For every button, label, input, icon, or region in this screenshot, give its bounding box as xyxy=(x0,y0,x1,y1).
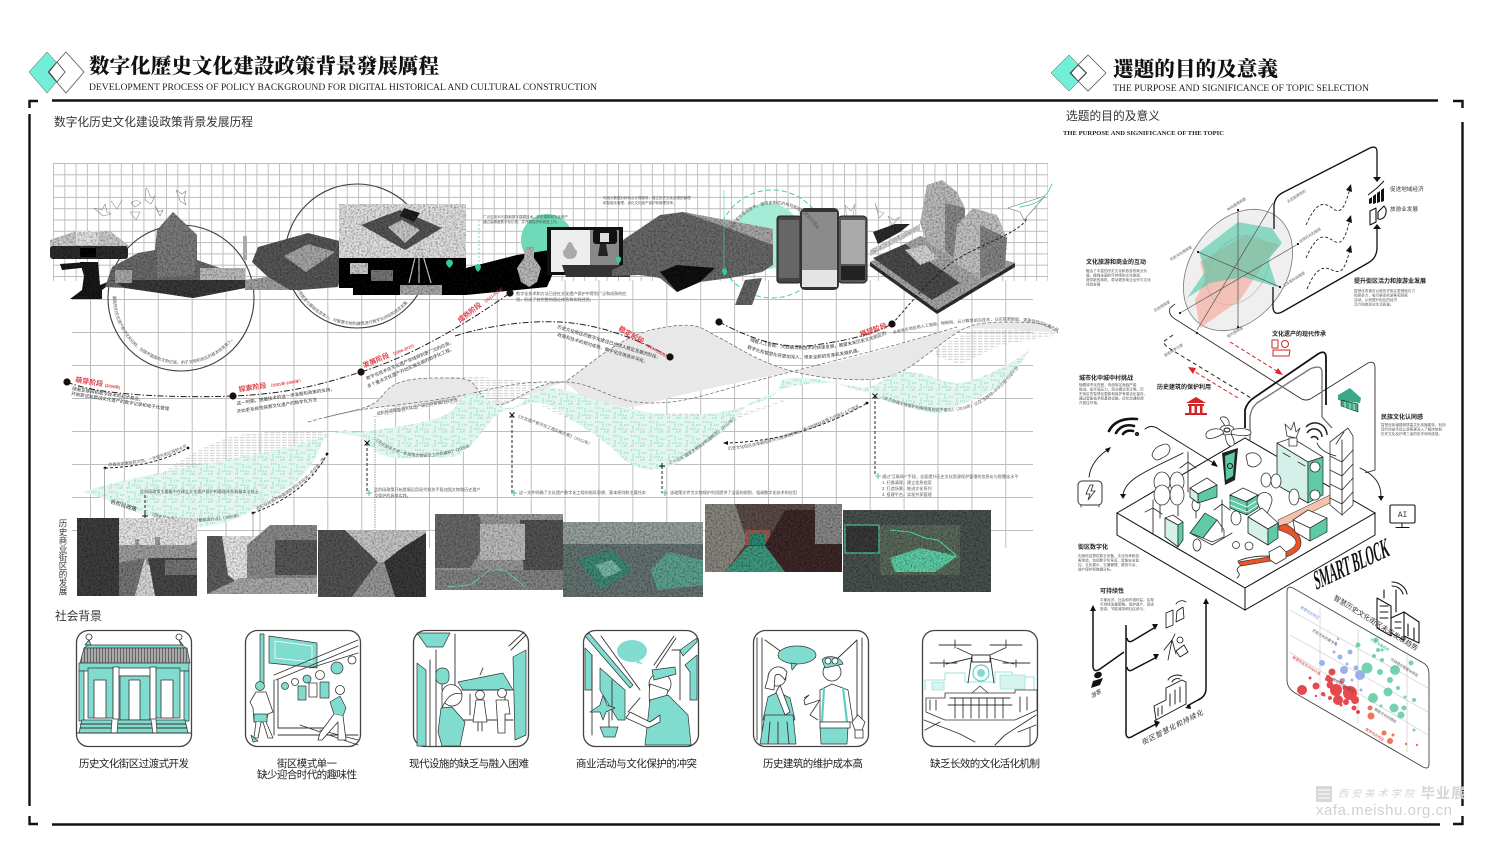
curve: policy 3 xyxy=(252,452,328,536)
arrowhead ai xyxy=(1378,496,1384,501)
arrowhead wifi xyxy=(1105,447,1111,453)
note: arc caption teal circle: 数字孪生和虚拟现实技术，使历史街区的体验和感知更加沉浸式 xyxy=(726,200,820,239)
plant pot xyxy=(1285,422,1300,446)
curve: policy 1: 改善历史建筑和文物，一步提升街区保护水平 xyxy=(108,444,186,466)
callout: policy 9 xyxy=(872,366,1018,497)
squiggle arrows xyxy=(1306,189,1350,289)
icon: double diamonds right xyxy=(1051,55,1106,91)
note: arc caption circle 1: 基础性的文化遗产数字化和归档，加强字面面向文物记录，用于文物和街区的基本信息录入。 xyxy=(112,296,233,364)
antenna post xyxy=(243,236,247,260)
stage: 发展阶段: 多个重点文化遗产开始实施全面的数字化工程。 xyxy=(366,345,455,390)
text: urban village: 史街区的智慧化更新和保护有助活化保存， xyxy=(1079,391,1147,396)
illustration: woman with book xyxy=(585,633,697,745)
card: commerce vs conservation xyxy=(584,630,698,746)
caption: card 2 xyxy=(257,757,357,781)
panel sub heading: purpose: THE PURPOSE AND SIGNIFICANCE OF THE TOPIC xyxy=(1063,130,1224,137)
callout: policy 2: 《历史文化遗产保护工程质量管理办法》（2000年） xyxy=(152,512,239,522)
photo row: historic streets xyxy=(77,504,991,597)
icons: map pins xyxy=(446,256,727,276)
text: urban village: 挑战。如环境压力、商业模式变迁等。历 xyxy=(1079,386,1144,392)
note: arc caption circle 2: 开展文物普查与基础信息录入，对重要文物和建筑进行数字化测绘和信息采集 xyxy=(294,281,408,326)
text: digital street: 客体验，包括数字化导览、智能安全监 xyxy=(1078,558,1139,562)
stage: 展望阶段 xyxy=(747,321,888,360)
label: visitor: 游客 xyxy=(1090,687,1104,700)
paper plane xyxy=(1008,184,1052,220)
watermark xyxy=(1316,785,1465,819)
label: pre-phase policy: 各阶段政策 xyxy=(109,497,138,514)
circle: teal accent left xyxy=(521,214,573,266)
squiggle heads xyxy=(1346,184,1352,253)
chart: future trend scatter xyxy=(1287,587,1429,768)
chart labels: 智能文化的感知 xyxy=(1373,707,1398,724)
text: cultural inheritance: 文化遗产的现代传承 xyxy=(1272,330,1326,338)
watermark show: 毕业展 xyxy=(1421,785,1465,801)
note: collage caption 2: 和智能化管理，优化文化遗产保护和管理效率。 xyxy=(603,200,676,205)
arrow: block to bus xyxy=(1123,453,1183,495)
title: right: 選題的目的及意義 xyxy=(1113,57,1278,81)
axis labels: 历史感观度 xyxy=(1153,299,1171,313)
stage: 探索阶段 xyxy=(236,375,335,415)
text: urban village: 随着城市化进程，传统街区面临严峻 xyxy=(1079,382,1137,387)
caption: card 3: 现代设施的缺乏与融入困难 xyxy=(409,757,530,770)
chart: radar xyxy=(1153,188,1322,358)
photo: roof structure xyxy=(612,212,773,305)
dots: red xyxy=(1297,668,1360,714)
photo: camera box xyxy=(547,227,630,277)
band: dashed wave outlines xyxy=(308,322,1058,422)
stage: 萌芽阶段: 萌芽阶段 (2000年) xyxy=(75,375,122,391)
panel: timeline grid xyxy=(53,163,1048,548)
stage: 展望阶段: 数字化和智慧化将更加深入，带来全新的变革和发展机遇。 xyxy=(747,344,859,360)
caption: card 5: 历史建筑的维护成本高 xyxy=(763,757,863,770)
curve: policy 1 xyxy=(104,444,190,518)
arrow: dashed red forward xyxy=(1230,342,1283,375)
callout: policy 6 xyxy=(509,412,646,496)
text: digital street: 街区数字化 xyxy=(1078,543,1108,551)
band: solid gray area xyxy=(308,322,1058,422)
subtitle: left: DEVELOPMENT PROCESS OF POLICY BACKGROUND FOR DIGITAL HISTORICAL AND CULTURAL CONSTRUCTION xyxy=(89,82,598,92)
circle: teal accent right xyxy=(718,190,826,298)
caption: card 2: 缺少迎合时代的趣味性 xyxy=(257,768,357,781)
watermark url: xafa.meishu.org.cn xyxy=(1316,802,1452,819)
text: digital street: 控、文化展示、交通管理、服务平台、 xyxy=(1078,562,1139,567)
vertical label: street development: 历史商业街区的发展 xyxy=(58,519,68,596)
windmill xyxy=(1180,452,1196,492)
curve: policy 8: 历史文化街区逐渐被用来作为旅游目的地，通过智慧科技等方式吸引人们游览 xyxy=(728,404,860,450)
stage: 萌芽阶段: 随着互联网和数字技术的初步普及， xyxy=(72,385,144,403)
stage: 发展阶段: 发展阶段（2006-2010） xyxy=(361,339,417,370)
text: sustainability: 旅游、节能减排和社区参与。 xyxy=(1100,606,1147,611)
cube building xyxy=(1248,508,1278,545)
battery box xyxy=(1145,500,1183,547)
flat building xyxy=(1293,510,1327,541)
callout: policy 9: 《关于加强文物保护利用改革的若干意见》（2018年）以及"互联网+中华文明"行动计划 xyxy=(882,366,1018,412)
line: policy 5 xyxy=(374,419,376,530)
axis labels: 自然风光的感观 xyxy=(1298,226,1322,244)
phones: app screens xyxy=(777,208,867,290)
icon: double diamonds left xyxy=(29,52,84,93)
arrowheads flow xyxy=(1090,598,1209,728)
solar house xyxy=(1190,500,1232,545)
arrowhead lower xyxy=(1373,224,1381,229)
text: national identity xyxy=(1381,413,1446,436)
callout: policy 6: 这一文件明确了文化遗产数字化工程的指导思想、基本原则和主要任务 xyxy=(519,489,646,495)
illustration: temple gate xyxy=(77,634,191,733)
band: gray hatched textures xyxy=(150,327,1058,482)
van xyxy=(1269,546,1286,564)
trees xyxy=(1154,472,1200,518)
card: revitalization mechanism xyxy=(922,630,1038,746)
icon: red bulb xyxy=(1272,340,1290,356)
panel xyxy=(1287,587,1429,768)
callout: policy 2: 此阶段政策主要集中在建立文化遗产保护的管理体系和基本法规上 xyxy=(140,488,259,494)
illustration: two people talking xyxy=(757,638,865,744)
arrow: dashed exchange black xyxy=(1163,335,1251,398)
icon: red temple xyxy=(1185,397,1207,415)
arrowhead upper xyxy=(1373,177,1381,182)
text: national identity: 民族文化认同感 xyxy=(1381,413,1423,421)
illustration: street and girl xyxy=(417,632,526,746)
timeline: development stages xyxy=(63,195,1059,415)
axis labels: 历史文化感观度 xyxy=(1169,244,1193,262)
chart labels: 历史文化的数字化 xyxy=(1311,628,1339,647)
dashed leader: teal xyxy=(478,220,480,264)
isometric city xyxy=(870,180,1015,314)
text: tourism and commerce: 体验发展 xyxy=(1086,282,1101,286)
watermark school: 西安美术学院 xyxy=(1338,788,1416,800)
callout: policy 9: 3. 搭建平台，实现共享管理 xyxy=(882,491,932,497)
panel heading: purpose: 选题的目的及意义 xyxy=(1066,109,1160,123)
icon: green temple xyxy=(1338,388,1361,412)
scanner on tripod xyxy=(50,231,128,299)
heading: social background: 社会背景 xyxy=(55,609,102,623)
callout: policy 9: 1. 扫描清理，建立信息档案 xyxy=(882,479,932,485)
text: sustainability: 可持续性 xyxy=(1100,587,1124,595)
callout: policy 9: 通过"互联网+"手段，全面提升历史文化资源保护管理的信息化与智慧化水平 xyxy=(882,473,1018,479)
callout: policy 6: 《文化遗产数字化工程实施方案》（2012年） xyxy=(518,414,590,445)
chart labels: 智慧街区的文化价值 xyxy=(1291,655,1322,676)
stage: 探索阶段: 探索阶段 （2001年-2005年） xyxy=(238,375,304,394)
label: smart block: SMART BLOCK xyxy=(1311,532,1392,596)
text: sustainability xyxy=(1100,587,1154,611)
stage: 稳定阶段: 稳定阶段（2014-2020） xyxy=(617,324,671,360)
photo: corridor scan xyxy=(705,504,842,572)
note: collage caption 2: 利用大数据分析和云计算服务，建立历史文化资源的管理 xyxy=(603,195,691,200)
text: district vitality: 提升街区活力和旅游业发展 xyxy=(1354,277,1426,285)
birds left xyxy=(94,188,186,220)
icon: visitor xyxy=(1091,671,1103,688)
callout: policy 7 xyxy=(659,418,797,496)
flow: sustainability arrows xyxy=(1093,603,1206,738)
arrow: radar to economy lower xyxy=(1273,228,1377,313)
arrow: dashed red backward xyxy=(1188,367,1238,398)
text: urban village xyxy=(1079,374,1147,405)
connector: brown loop xyxy=(1170,304,1375,473)
callout: policy 2 xyxy=(140,488,259,522)
axis labels xyxy=(1153,188,1322,358)
callout: policy 7: 《"十三五"国家文物保护利用规划》（2017年） xyxy=(670,418,734,464)
note: collage caption 1: 广泛应用3D扫描和数字建模技术，历史建筑和文化遗产 xyxy=(483,214,568,219)
icon: growth chart xyxy=(1368,181,1384,204)
axes xyxy=(1180,203,1298,330)
curves: stage connectors xyxy=(67,218,1027,397)
watermark logo xyxy=(1316,786,1332,802)
text: urban village: 城市化中城中村挑战 xyxy=(1079,374,1133,382)
chart labels: 智慧化的街区 xyxy=(1299,605,1321,620)
connector: thick black xyxy=(1245,352,1326,428)
block base xyxy=(1117,438,1375,610)
policy callouts xyxy=(104,366,1018,574)
illustration: street with lanterns xyxy=(250,634,358,745)
photo: old street 2 xyxy=(207,525,317,594)
stage: 探索阶段: 这一时期，随着技术的进一步发展和政策的支持， xyxy=(236,385,335,407)
stage: 展望阶段: 展望阶段 xyxy=(859,321,888,339)
text: digital street xyxy=(1078,543,1139,572)
axis dots xyxy=(1179,209,1299,334)
arrow: wifi to phone xyxy=(1145,426,1215,464)
photo: old building ruin xyxy=(105,212,245,298)
stage: 稳定阶段: 历史文化街区的数字化建设已经进入稳定发展的阶段， xyxy=(556,323,662,361)
photo: old street 3 xyxy=(318,530,426,597)
subtitle: right: THE PURPOSE AND SIGNIFICANCE OF TOPIC SELECTION xyxy=(1113,83,1370,93)
callout: policy 9: 2. 打造场景，推进文化系列 xyxy=(882,485,932,491)
arrow: bus to wifi xyxy=(1089,449,1109,477)
card: transitional development xyxy=(76,630,192,746)
connector: gray xyxy=(1250,367,1332,440)
band: green maze texture xyxy=(83,350,1030,527)
photo: vase panel xyxy=(466,247,553,295)
text: district vitality: 智慧化改造可以使历史街区更具吸引力 xyxy=(1354,288,1415,293)
icon: wifi xyxy=(1109,419,1138,435)
fan xyxy=(1206,417,1251,446)
photo: dashboard xyxy=(843,510,991,592)
dots: stage markers xyxy=(63,289,896,400)
callout: policy 4 xyxy=(364,439,480,498)
callout: policy 4: 《文化部关于进一步加强文物安全工作的通知》（2006年） xyxy=(376,439,470,458)
note: collage caption 1: 通过高精度数字化记录，并开展保护和修复工作。 xyxy=(483,219,560,224)
icon: phone and house xyxy=(1166,601,1186,628)
text: district vitality: 和竞争力，吸引更多的游客和商家 xyxy=(1354,292,1408,298)
axis labels: 休闲度感观度 xyxy=(1226,196,1247,212)
icon: skyline xyxy=(1377,582,1419,643)
phone card xyxy=(1222,448,1238,485)
arrowhead phone xyxy=(1211,460,1218,467)
chart grid xyxy=(1289,608,1428,752)
label: regional economy: 促进地域经济 xyxy=(1390,185,1424,193)
text: district vitality: 活动。从而提升街区的经济 xyxy=(1354,297,1398,302)
icon: ai monitor: AI xyxy=(1398,511,1407,520)
axis labels: 游览和参与度 xyxy=(1163,342,1184,358)
stage: 萌芽阶段: 开始尝试和尝试文化遗产的数字记录和电子化管理 xyxy=(71,390,170,413)
chart labels: 数字化的街区 xyxy=(1364,727,1386,742)
photo: courtyard scan xyxy=(245,233,363,290)
icon: windmill solar xyxy=(1164,634,1188,660)
wave caption: future: 未来将多地应用人工智能、物联网、云计算等前沿技术，以实现更智能、更高效的文化遗产保护。 xyxy=(893,317,1059,334)
title: left: 数字化歷史文化建設政策背景發展厲程 xyxy=(89,54,439,78)
text: tourism and commerce: 融合了丰富的历史文化和旅游的商业价 xyxy=(1086,268,1147,273)
stage: 发展阶段: 数字化技术在文化遗产领域得到更广泛的应用， xyxy=(365,338,455,382)
text: urban village: 升居住环境。 xyxy=(1079,400,1101,405)
stage: 成熟阶段 xyxy=(456,282,627,325)
panel heading: timeline: 数字化历史文化建设政策背景发展历程 xyxy=(54,115,253,129)
photo: tree street xyxy=(435,514,563,590)
illustration: drone over building xyxy=(924,640,1037,745)
right panel: diagram xyxy=(1078,147,1446,768)
text: digital street: 遗产保护和数据分析。 xyxy=(1078,566,1114,572)
leader: teal circle xyxy=(723,190,725,270)
text: national identity: 历史文化及护得三者的历史和传统感。 xyxy=(1381,431,1442,436)
stage: 稳定阶段: 政策和技术的相对成熟，数字化应用逐步深化。 xyxy=(556,331,649,366)
text: district vitality: 活力和旅游业生活质量。 xyxy=(1354,302,1394,306)
polygon: series green xyxy=(1187,222,1282,298)
label: policy 5: 此阶段政策强调文化遗产保护和管理的科学性 xyxy=(376,396,458,416)
text: tourism and commerce xyxy=(1086,258,1151,286)
photo: model overlay xyxy=(563,522,703,597)
isometric smart block xyxy=(1117,417,1375,610)
label: smart sustainable: 街区智慧化和持续化 xyxy=(1140,708,1205,747)
text: digital street: 利用科技提供数字设备、文化传承和游 xyxy=(1078,553,1139,558)
polygon: series pink xyxy=(1195,235,1280,328)
road orange xyxy=(1238,524,1301,566)
road pale xyxy=(1278,495,1334,528)
dots: green xyxy=(1356,638,1416,732)
photo: old street 1 xyxy=(77,518,197,596)
caption: card 1: 历史文化街区过渡式开发 xyxy=(79,757,190,770)
text: tourism and commerce: 文化旅游和商业的互动 xyxy=(1086,258,1146,266)
text: urban village: 通过智能技术和基础设施，优化交通和提 xyxy=(1079,396,1144,400)
green box xyxy=(1190,478,1217,503)
building teal tall xyxy=(1277,438,1323,503)
tower jenga xyxy=(1330,428,1353,515)
stage: 萌芽阶段 xyxy=(71,375,170,413)
cloud 1 xyxy=(1152,444,1261,467)
stage: 成熟阶段: 成熟阶段（2011-2013） xyxy=(456,282,506,325)
arrow: radar to economy upper xyxy=(1274,147,1377,229)
caption: card 6: 缺乏长效的文化活化机制 xyxy=(930,757,1040,770)
chart labels: 街区发展趋势 xyxy=(1369,637,1391,652)
right section header xyxy=(1051,55,1370,93)
axis labels: 业态和建筑的 xyxy=(1286,188,1307,204)
card: modern facilities xyxy=(414,630,528,746)
chart labels xyxy=(1291,605,1420,742)
card: maintenance cost xyxy=(754,630,868,746)
text: sustainability: 平衡经济、社会和环境利益。实现 xyxy=(1100,597,1154,602)
pin xyxy=(1257,493,1272,517)
callout: policy 4: 此阶段政策开始提倡运用现代科技手段加强文物和历史遗产 xyxy=(374,486,480,492)
text: tourism and commerce: 提供新的商机，带动更多商业合作与文化 xyxy=(1086,277,1151,282)
stage: 探索阶段: 开始更系统地探索文化遗产的数字化方法 xyxy=(236,396,318,415)
text: tourism and commerce: 值。增强全面的可持续的文化旅游， xyxy=(1086,272,1144,278)
text: national identity: 智慧化街道能够提高文化传播能效，利用 xyxy=(1381,422,1446,427)
callout: policy 7: 该政策文件为文物保护利用提供了全面的规划，强调数字化技术的应用 xyxy=(670,489,797,495)
stage: 成熟阶段: 用，形成了较完整的理论体系和实践经验。 xyxy=(516,296,594,302)
photo: model render xyxy=(339,204,466,295)
chart labels: 可持续的智能化街区 xyxy=(1389,657,1420,678)
path light xyxy=(1237,556,1270,578)
callout: policy 4: 及保护的具体实践。 xyxy=(374,492,411,498)
stage: 展望阶段: 随着人工智能、大数据等新技术的快速发展，展望未来历史文化街区的 xyxy=(750,331,886,350)
caption: card 4: 商业活动与文化保护的冲突 xyxy=(576,757,698,770)
arrow: wifi to tower xyxy=(1317,443,1336,456)
icon: ev bus xyxy=(1078,481,1102,507)
card: single street mode xyxy=(246,630,360,746)
stage: 成熟阶段: 数字化技术和方法已经在文化遗产保护中得到广泛和成熟的应 xyxy=(516,290,627,296)
text: sustainability: 可持续发展策略。保护遗产、促进 xyxy=(1100,602,1154,606)
arrow: tower to ai xyxy=(1360,468,1381,496)
axis labels: 工业和科技感观 xyxy=(1282,270,1306,288)
dots: orange xyxy=(1368,706,1418,746)
icon: wifi small xyxy=(1306,423,1327,440)
chart labels: 智慧街区的数字 xyxy=(1331,677,1356,694)
left section header xyxy=(29,52,598,93)
arrowhead block xyxy=(1120,494,1126,499)
tree row xyxy=(1193,473,1299,551)
label: tourism: 旅游业发展 xyxy=(1390,205,1418,213)
caption: card 2: 街区模式单一 xyxy=(277,757,338,770)
chart title: 智慧历史文化街区未来发展趋势 xyxy=(1332,593,1420,653)
chart: policy wave bands xyxy=(83,322,1058,527)
curve: policy 3: 此阶段政策开始强调数字化手段进一步应用，提高了保护效率 xyxy=(256,458,326,510)
axis labels: 现代感观度 xyxy=(1226,325,1244,339)
collage: digital heritage imagery xyxy=(50,180,1052,371)
birds right xyxy=(845,203,900,225)
icon: smart building xyxy=(1154,675,1186,720)
text: district vitality xyxy=(1354,277,1426,306)
icon: tourism leaf xyxy=(1370,206,1386,225)
dots: blue xyxy=(1319,638,1365,692)
circles: history rings xyxy=(108,184,429,371)
stack building xyxy=(1230,488,1258,515)
text: national identity: 现代科技手段让游客更深入了解传统和 xyxy=(1381,426,1442,432)
icon: ai monitor xyxy=(1390,505,1415,528)
text: heritage reuse: 历史建筑的保护利用 xyxy=(1157,383,1211,391)
